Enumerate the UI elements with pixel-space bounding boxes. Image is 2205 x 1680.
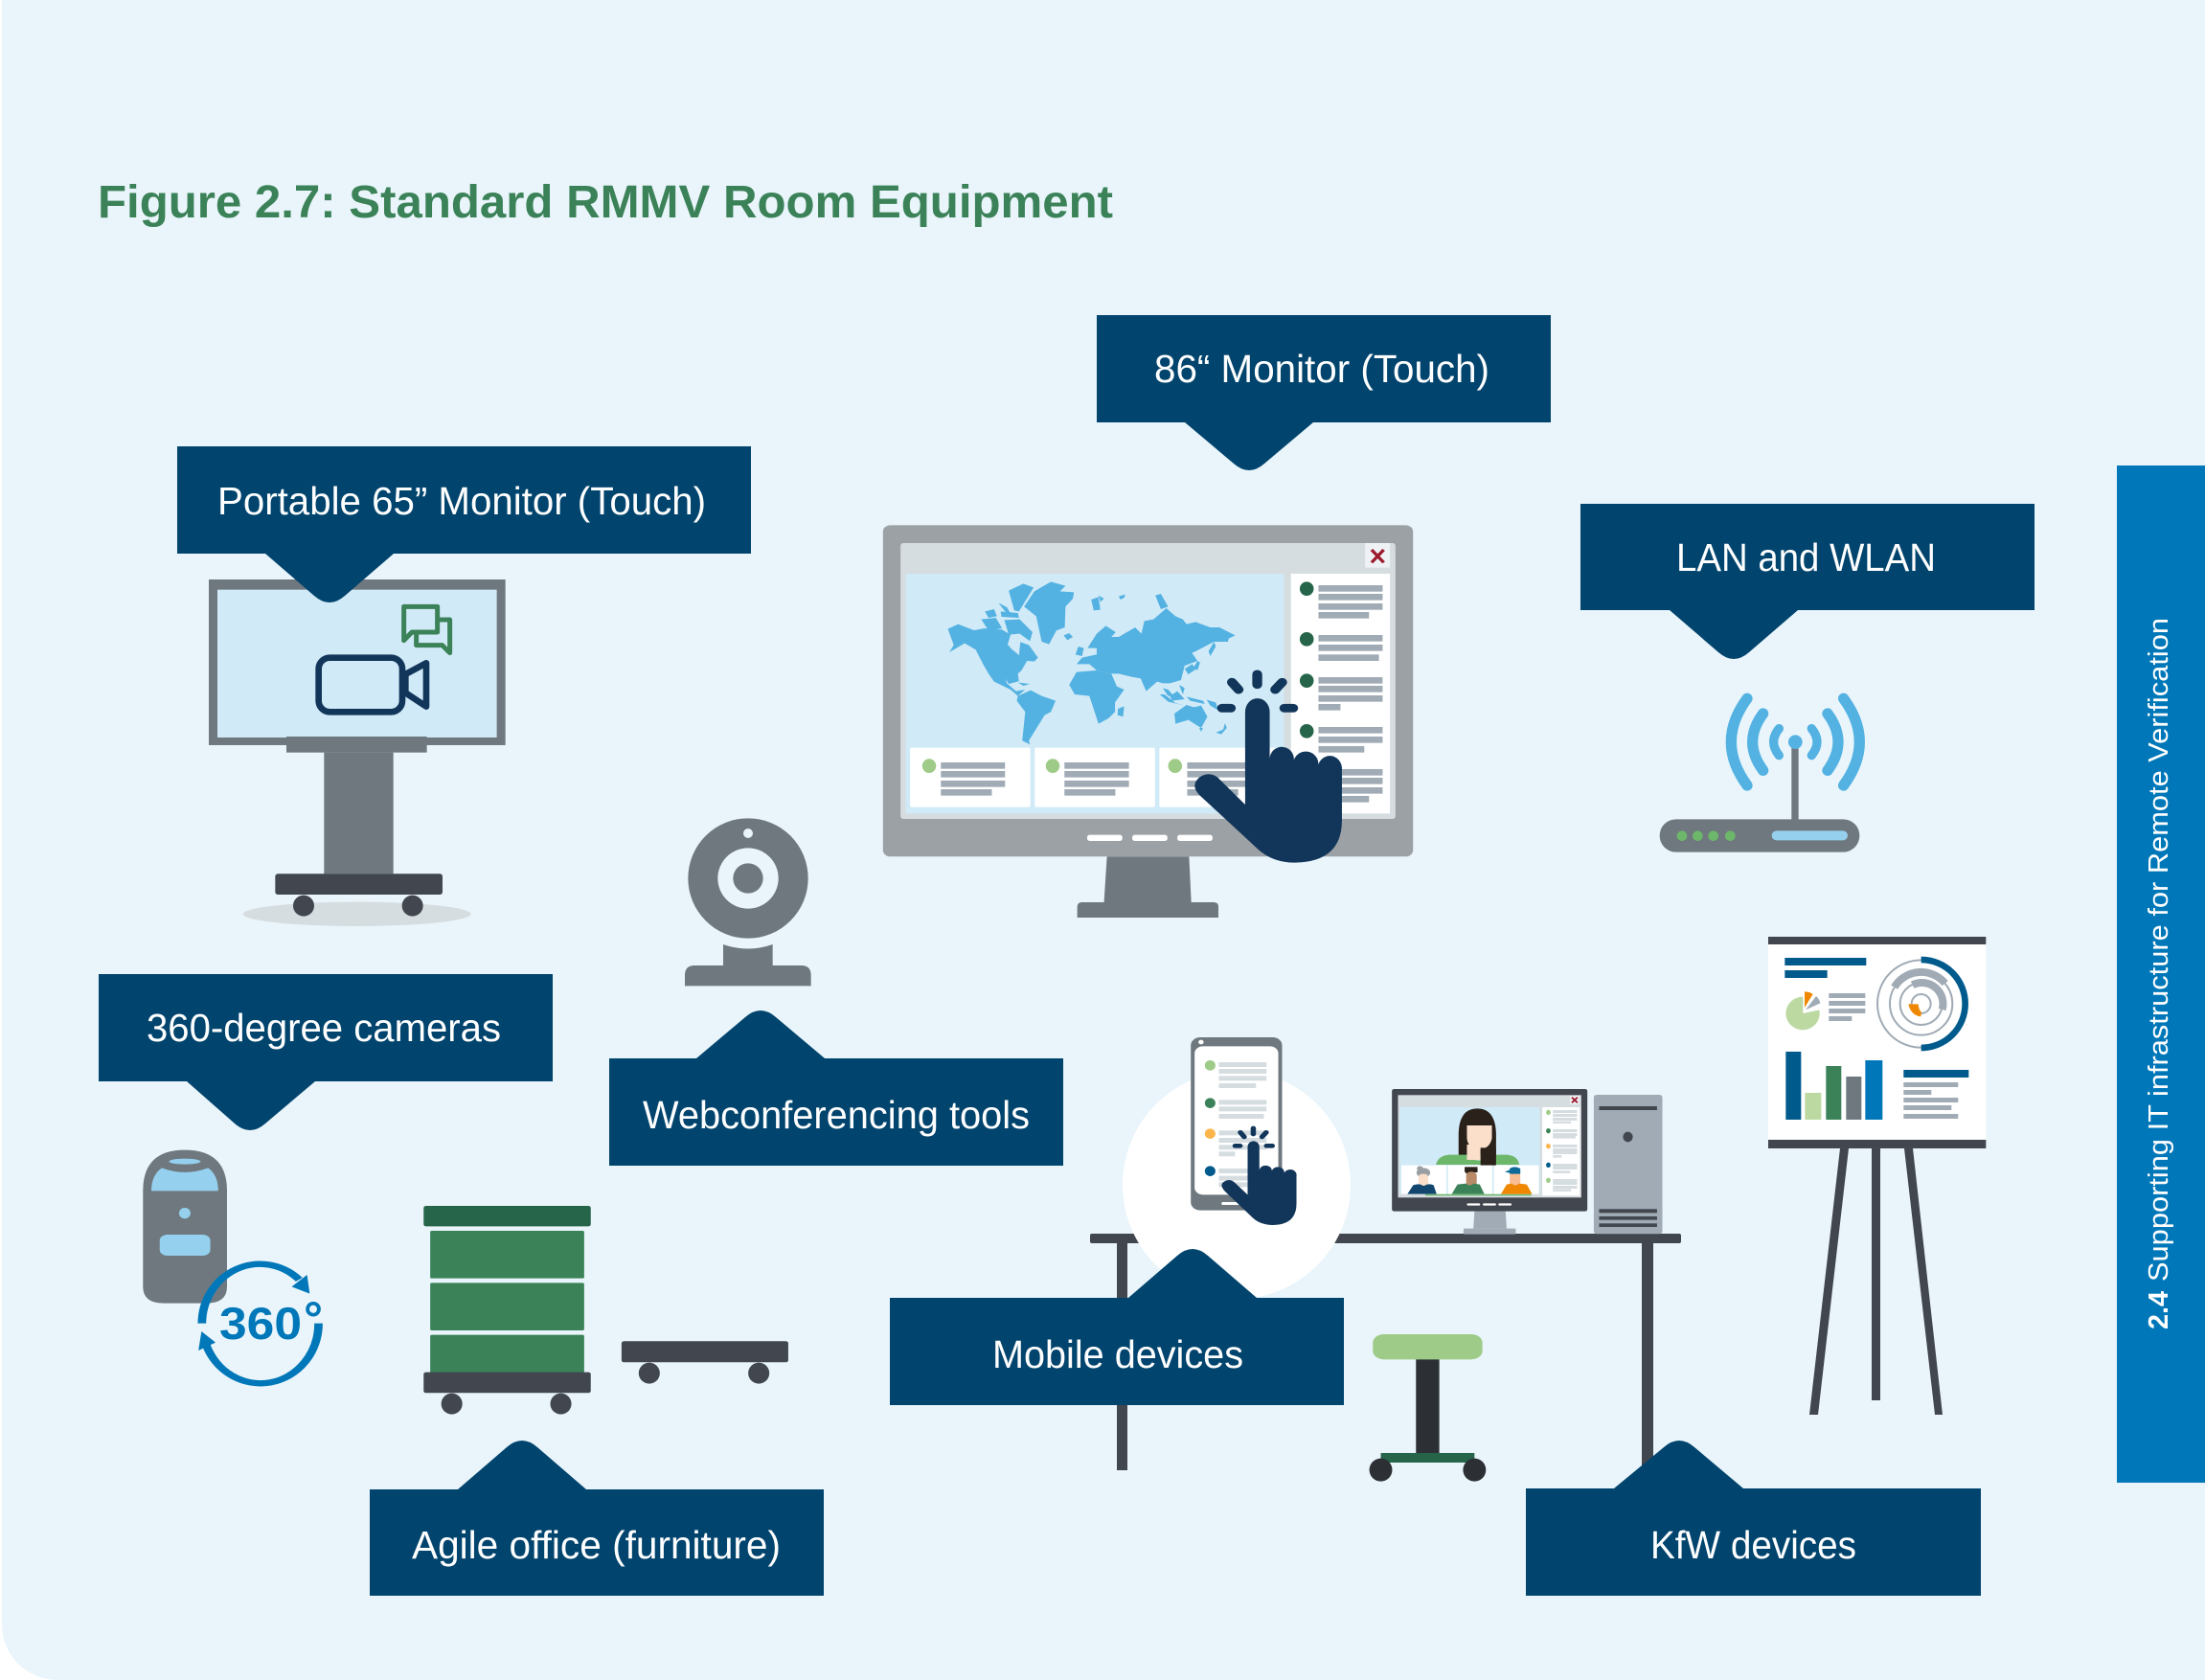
callout: 86 inch Monitor <box>1097 315 1551 470</box>
icon: router with wifi signal <box>1660 698 1859 852</box>
icon: desk <box>1090 1234 1681 1494</box>
icon: stool <box>1370 1334 1486 1482</box>
icon: 360 degree camera: ° <box>304 1292 323 1346</box>
callout: LAN and WLAN <box>1580 504 2035 659</box>
callout: Mobile devices: Mobile devices <box>992 1332 1243 1376</box>
side tab: section heading: Supporting IT infrastructure for Remote Verification <box>2144 618 2174 1282</box>
side tab: section heading: 2.4 <box>2144 1291 2174 1329</box>
callout: Webconferencing tools <box>609 1010 1063 1166</box>
title: Figure 2.7: Standard RMMV Room Equipment <box>98 177 1113 228</box>
callout: Agile office furniture: Agile office (furniture) <box>412 1523 781 1567</box>
icon: desktop monitor with video conference <box>1392 1089 1587 1235</box>
icon: webcam <box>685 818 811 986</box>
icon: computer tower <box>1594 1095 1662 1234</box>
icon: white circle behind phone <box>1123 1071 1351 1299</box>
callout: Mobile devices <box>890 1249 1344 1405</box>
callout: Portable 65 inch Monitor: Portable 65” Monitor (Touch) <box>217 479 706 523</box>
callout: KfW devices <box>1526 1441 1981 1596</box>
icon: smartphone with touch gesture <box>1191 1037 1297 1225</box>
icon: agile office furniture cart <box>423 1206 788 1415</box>
icon: 360 degree camera <box>143 1150 323 1383</box>
callout: LAN and WLAN: LAN and WLAN <box>1676 535 1936 579</box>
callout: Agile office furniture <box>370 1441 824 1596</box>
icon: portable 65 inch monitor on stand <box>209 579 506 926</box>
callout: Portable 65 inch Monitor <box>177 446 751 602</box>
icon: 86 inch touch monitor with world map <box>883 525 1413 918</box>
callout: 360-degree cameras: 360-degree cameras <box>147 1006 501 1050</box>
side tab: section heading <box>2117 465 2205 1483</box>
callout: 86 inch Monitor: 86“ Monitor (Touch) <box>1154 347 1489 391</box>
callout: KfW devices: KfW devices <box>1650 1523 1856 1567</box>
callout: 360-degree cameras <box>99 974 553 1130</box>
icon: flipchart with charts <box>1768 937 1986 1415</box>
callout: Webconferencing tools: Webconferencing tools <box>643 1093 1030 1137</box>
icon: 360 degree camera: 360 <box>219 1298 302 1349</box>
